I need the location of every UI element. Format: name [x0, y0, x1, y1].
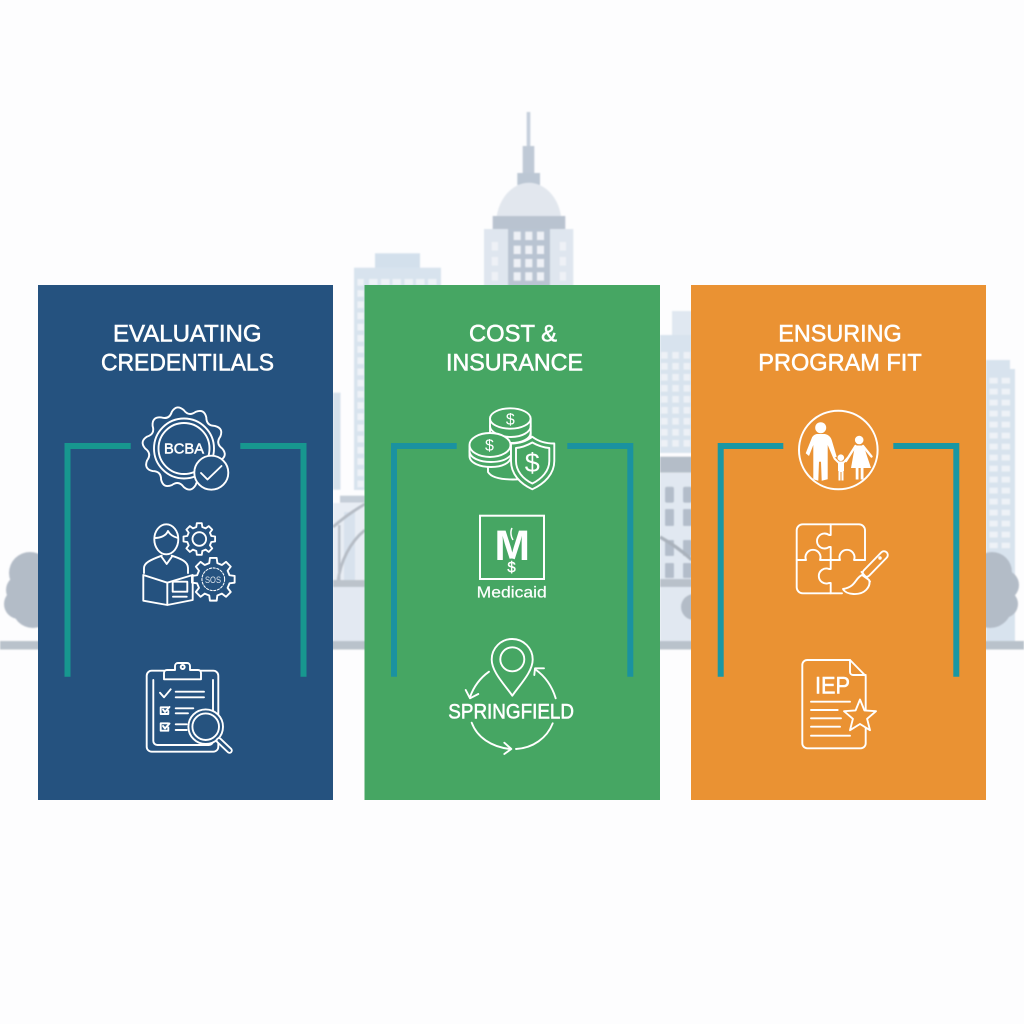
icon: BCBA badge: BCBA: [164, 442, 204, 458]
heading: [758, 321, 922, 377]
heading: [446, 321, 583, 377]
right-centre building: [660, 311, 707, 641]
icon: puzzle and paintbrush: [797, 524, 884, 594]
icon: Medicaid logo: [480, 516, 544, 579]
teal bracket: [721, 446, 956, 677]
ground line: [0, 641, 1024, 650]
right tree: [968, 552, 1019, 628]
panel background: [691, 285, 986, 800]
panel: ensuring program fit: [691, 285, 986, 800]
heading: CREDENTILALS: [101, 350, 274, 377]
heading: PROGRAM FIT: [758, 350, 922, 377]
icon: person reading with gears: [143, 523, 235, 605]
panel: cost and insurance: [364, 285, 660, 800]
icon: coins and shield: $: [525, 448, 540, 478]
icon: coins and shield: $: [485, 438, 494, 454]
heading: ENSURING: [778, 321, 902, 348]
capitol tower: [484, 112, 573, 289]
left bridge: [333, 496, 365, 641]
heading: COST &: [469, 321, 557, 348]
panel background: [364, 285, 660, 800]
icon: IEP document with star: [802, 660, 876, 748]
icon: IEP document with star: IEP: [815, 672, 850, 699]
right building: [986, 360, 1015, 641]
icon: Medicaid logo: $: [507, 559, 516, 576]
left tree: [4, 552, 54, 628]
icon: coins and shield: $: [506, 412, 515, 428]
panel: evaluating credentials: [38, 285, 333, 800]
left building: [333, 253, 441, 490]
panel background: [38, 285, 333, 800]
teal bracket: [68, 446, 304, 677]
Medicaid label: Medicaid: [477, 584, 547, 601]
icon: person reading with gears: SOS: [205, 575, 221, 585]
icon: Springfield location pin: [448, 639, 574, 754]
heading: INSURANCE: [446, 350, 583, 377]
icon: BCBA badge: [143, 407, 228, 490]
blue bracket: [394, 446, 630, 677]
skyline background: [0, 112, 1024, 650]
icon: coins and shield: [470, 408, 554, 489]
icon: Medicaid logo: M: [494, 522, 530, 570]
icon: clipboard with magnifier: [147, 663, 230, 752]
icon: family in circle: [799, 411, 878, 489]
heading: [101, 321, 274, 377]
icon: Springfield location pin: SPRINGFIELD: [448, 699, 574, 723]
heading: EVALUATING: [113, 321, 262, 348]
